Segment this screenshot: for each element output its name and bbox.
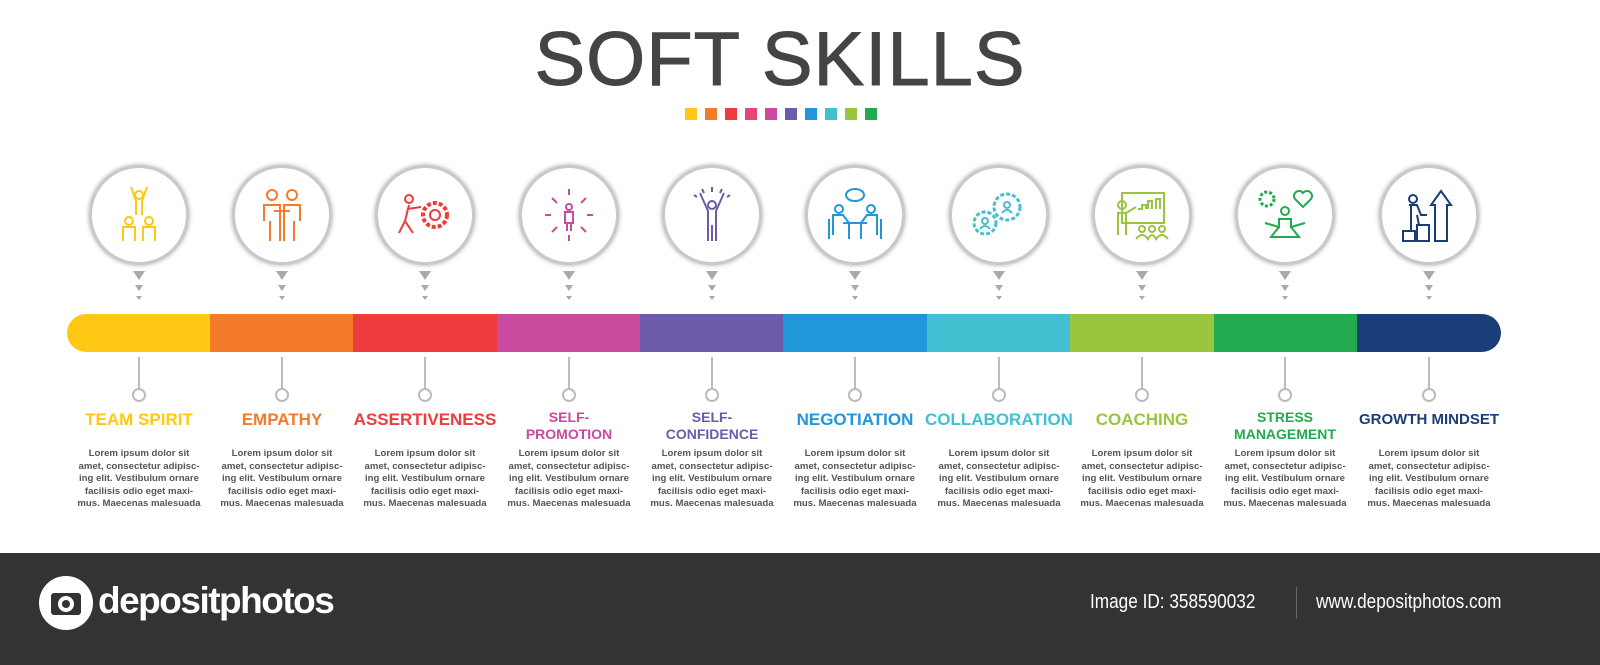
column: negotiation — [793, 162, 917, 509]
text: mus. Maecenas malesuada — [1080, 498, 1204, 509]
text: Lorem ipsum dolor sit — [519, 448, 619, 459]
connector — [132, 357, 146, 402]
text: amet, consectetur adipisc- — [78, 461, 200, 472]
heading: EMPATHY — [242, 410, 322, 429]
text: ing elit. Vestibulum ornare — [1082, 473, 1202, 484]
heading: PROMOTION — [526, 426, 612, 442]
connector — [1357, 355, 1501, 403]
text — [220, 448, 344, 509]
heading: COACHING — [1096, 410, 1188, 429]
arrow — [563, 271, 575, 300]
heading — [526, 409, 612, 442]
color squares — [685, 108, 877, 120]
heading: ASSERTIVENESS — [354, 410, 496, 429]
text: ing elit. Vestibulum ornare — [795, 473, 915, 484]
text: facilisis odio eget maxi- — [945, 486, 1053, 497]
text: Lorem ipsum dolor sit — [232, 448, 332, 459]
connector — [705, 357, 719, 402]
arrow — [133, 271, 145, 300]
icon: stress management — [1235, 165, 1335, 265]
text: ing elit. Vestibulum ornare — [1369, 473, 1489, 484]
text: mus. Maecenas malesuada — [937, 498, 1061, 509]
text: amet, consectetur adipisc- — [938, 461, 1060, 472]
heading: CONFIDENCE — [666, 426, 758, 442]
text: ing elit. Vestibulum ornare — [652, 473, 772, 484]
heading: SELF- — [692, 409, 732, 425]
text: amet, consectetur adipisc- — [794, 461, 916, 472]
connector — [418, 357, 432, 402]
text: Lorem ipsum dolor sit — [805, 448, 905, 459]
icon: assertiveness — [375, 165, 475, 265]
text: facilisis odio eget maxi- — [1375, 486, 1483, 497]
heading — [666, 409, 758, 442]
image id: Image ID: 358590032 — [1090, 591, 1255, 613]
heading: TEAM SPIRIT — [85, 410, 193, 429]
connector — [275, 357, 289, 402]
text: amet, consectetur adipisc- — [1368, 461, 1490, 472]
arrow — [419, 271, 431, 300]
heading: COLLABORATION — [925, 410, 1073, 429]
text: facilisis odio eget maxi- — [515, 486, 623, 497]
text: amet, consectetur adipisc- — [1224, 461, 1346, 472]
connector — [992, 357, 1006, 402]
icon: team spirit — [89, 165, 189, 265]
text — [793, 448, 917, 509]
text: Lorem ipsum dolor sit — [1092, 448, 1192, 459]
logo — [38, 575, 348, 631]
connector — [1278, 357, 1292, 402]
text: Lorem ipsum dolor sit — [1235, 448, 1335, 459]
arrow — [706, 271, 718, 300]
text: amet, consectetur adipisc- — [1081, 461, 1203, 472]
icon: self-promotion — [519, 165, 619, 265]
icon: coaching — [1092, 165, 1192, 265]
text — [1080, 448, 1204, 509]
footer — [0, 553, 1600, 665]
text — [1357, 448, 1501, 511]
text: mus. Maecenas malesuada — [793, 498, 917, 509]
text — [507, 448, 631, 509]
logo: depositphotos — [98, 580, 333, 621]
heading — [1234, 409, 1336, 442]
text: amet, consectetur adipisc- — [364, 461, 486, 472]
column: assertiveness — [354, 162, 496, 509]
text: Lorem ipsum dolor sit — [89, 448, 189, 459]
text: mus. Maecenas malesuada — [1223, 498, 1347, 509]
arrow — [1279, 271, 1291, 300]
title: SOFT SKILLS — [534, 17, 1026, 102]
text: facilisis odio eget maxi- — [658, 486, 766, 497]
icon: growth mindset — [1379, 165, 1479, 265]
text — [77, 448, 201, 509]
text: Lorem ipsum dolor sit — [662, 448, 762, 459]
text: ing elit. Vestibulum ornare — [939, 473, 1059, 484]
column: growth mindset — [1357, 165, 1501, 515]
icon: self-confidence — [662, 165, 762, 265]
text: mus. Maecenas malesuada — [77, 498, 201, 509]
text: facilisis odio eget maxi- — [371, 486, 479, 497]
arrow — [276, 271, 288, 300]
text: ing elit. Vestibulum ornare — [1225, 473, 1345, 484]
arrow — [1357, 269, 1501, 307]
url: www.depositphotos.com — [1316, 591, 1501, 613]
heading: SELF- — [549, 409, 589, 425]
text: facilisis odio eget maxi- — [801, 486, 909, 497]
text: amet, consectetur adipisc- — [651, 461, 773, 472]
icon: collaboration — [949, 165, 1049, 265]
text: ing elit. Vestibulum ornare — [365, 473, 485, 484]
column: self-promotion — [507, 162, 631, 509]
text: Lorem ipsum dolor sit — [1379, 448, 1479, 459]
column: team spirit — [77, 162, 201, 509]
column: stress management — [1223, 162, 1347, 509]
connector — [848, 357, 862, 402]
heading: STRESS — [1257, 409, 1313, 425]
text: amet, consectetur adipisc- — [508, 461, 630, 472]
icon: empathy — [232, 165, 332, 265]
text: facilisis odio eget maxi- — [228, 486, 336, 497]
heading: NEGOTIATION — [797, 410, 913, 429]
text: amet, consectetur adipisc- — [221, 461, 343, 472]
icon: negotiation — [805, 165, 905, 265]
text: Lorem ipsum dolor sit — [375, 448, 475, 459]
text: facilisis odio eget maxi- — [1231, 486, 1339, 497]
text: mus. Maecenas malesuada — [507, 498, 631, 509]
text — [650, 448, 774, 509]
text: mus. Maecenas malesuada — [363, 498, 487, 509]
arrow — [849, 271, 861, 300]
text: mus. Maecenas malesuada — [1367, 498, 1491, 509]
column: empathy — [220, 162, 344, 509]
text: ing elit. Vestibulum ornare — [79, 473, 199, 484]
column: self-confidence — [650, 162, 774, 509]
text: mus. Maecenas malesuada — [650, 498, 774, 509]
arrow — [993, 271, 1005, 300]
column: coaching — [1080, 162, 1204, 509]
column: collaboration — [925, 162, 1073, 509]
text: ing elit. Vestibulum ornare — [222, 473, 342, 484]
text: facilisis odio eget maxi- — [1088, 486, 1196, 497]
text — [937, 448, 1061, 509]
arrow — [1136, 271, 1148, 300]
heading: GROWTH MINDSET — [1359, 411, 1499, 428]
text: ing elit. Vestibulum ornare — [509, 473, 629, 484]
text: Lorem ipsum dolor sit — [949, 448, 1049, 459]
connector — [1135, 357, 1149, 402]
text — [1223, 448, 1347, 509]
heading: MANAGEMENT — [1234, 426, 1336, 442]
text — [363, 448, 487, 509]
text: mus. Maecenas malesuada — [220, 498, 344, 509]
connector — [562, 357, 576, 402]
timeline bar — [67, 314, 1501, 352]
text: facilisis odio eget maxi- — [85, 486, 193, 497]
